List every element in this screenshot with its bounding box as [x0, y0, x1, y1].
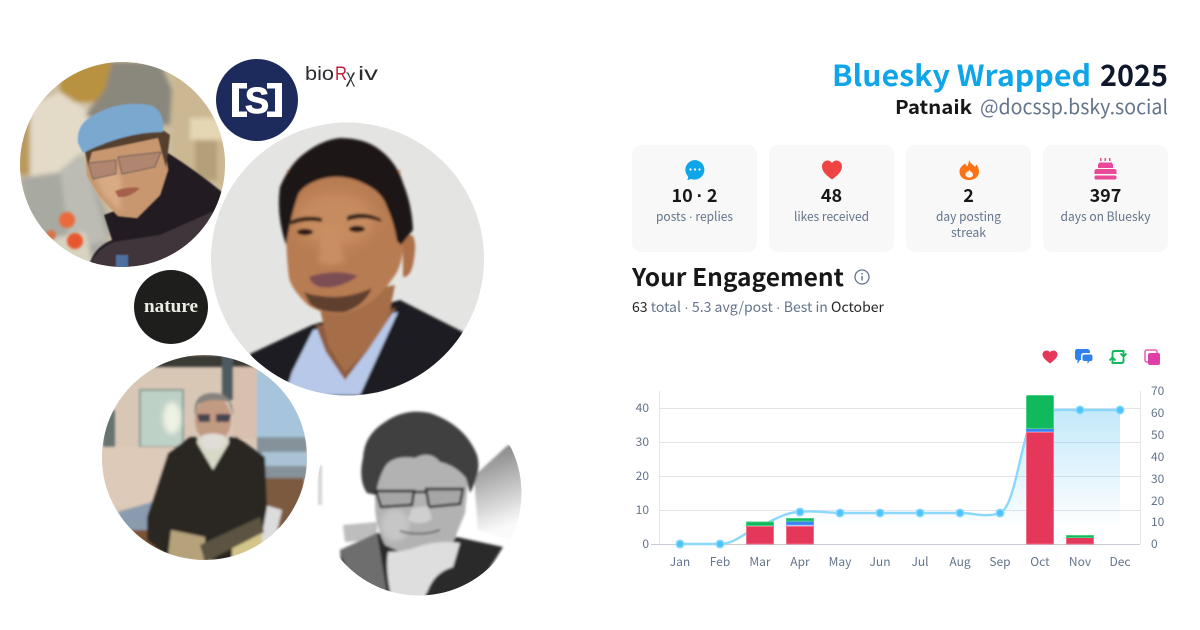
user name and handle	[895, 91, 1168, 120]
stat card: likes received: likes received	[794, 206, 869, 225]
stat card: likes received: 48	[821, 182, 842, 208]
avatar: man in dark blazer	[211, 122, 484, 400]
logo: bioRxiv: χ	[345, 63, 356, 87]
left axis labels: 0	[642, 535, 649, 552]
heading: Your Engagement: Your Engagement	[631, 258, 844, 293]
month labels: Dec	[1109, 553, 1131, 570]
month labels: Aug	[949, 553, 971, 570]
left axis labels: 40	[636, 399, 649, 416]
cumulative points	[676, 406, 1124, 548]
stat card: day posting streak: day posting	[936, 206, 1001, 225]
stat card: likes received	[769, 145, 894, 252]
icon: cake	[1094, 158, 1116, 180]
icon: info	[855, 270, 869, 284]
stat card: day posting streak	[906, 145, 1031, 252]
stat card: day posting streak: streak	[951, 222, 986, 241]
left axis labels: 10	[636, 501, 649, 518]
icon: reposts	[1110, 351, 1126, 363]
logo: bioRxiv: R	[335, 64, 347, 85]
logo: nature: nature	[144, 296, 198, 317]
bar: April	[786, 518, 814, 544]
right axis labels: 10	[1151, 513, 1165, 530]
engagement summary: 63 total · 5.3 avg/post · Best in October	[632, 297, 885, 317]
bar: October	[1026, 396, 1054, 544]
avatar: man in blue cap	[18, 60, 228, 270]
stat card: posts and replies	[632, 145, 757, 252]
stat card: posts and replies: posts · replies	[656, 206, 733, 225]
logo: nature	[134, 270, 208, 344]
icon: speech bubble	[685, 160, 704, 180]
right axis labels: 50	[1151, 426, 1165, 443]
month labels: Jan	[670, 553, 690, 570]
left axis labels	[636, 399, 649, 552]
stat card: days on Bluesky	[1043, 145, 1168, 252]
stat card: days on Bluesky: days on Bluesky	[1060, 206, 1151, 225]
month labels	[670, 553, 1131, 570]
month labels: Oct	[1030, 553, 1050, 570]
stat card: day posting streak: 2	[963, 182, 974, 208]
month labels: Mar	[749, 553, 771, 570]
chart legend	[1042, 349, 1160, 365]
user name and handle: @docssp.bsky.social	[980, 91, 1168, 120]
month labels: Sep	[989, 553, 1011, 570]
cumulative area	[680, 410, 1120, 544]
logo: bioRxiv: bio	[305, 64, 334, 85]
icon: replies	[1075, 349, 1092, 364]
left axis labels: 30	[636, 433, 649, 450]
cumulative line	[680, 410, 1120, 544]
stat card: days on Bluesky: 397	[1090, 182, 1121, 208]
right axis labels: 70	[1151, 382, 1165, 399]
icon: quotes	[1145, 350, 1160, 365]
icon: flame	[960, 160, 979, 180]
icon: like	[1042, 350, 1058, 364]
logo: SSRN	[216, 59, 298, 141]
chart: monthly engagement	[636, 382, 1165, 570]
left axis labels: 20	[636, 467, 649, 484]
month labels: Jun	[869, 553, 891, 570]
user name and handle: Patnaik	[895, 93, 973, 120]
right axis labels: 20	[1151, 492, 1165, 509]
grid lines	[660, 391, 1140, 544]
month labels: Feb	[710, 553, 730, 570]
month labels: Jul	[911, 553, 929, 570]
title: Bluesky Wrapped	[832, 53, 1091, 95]
stat card: posts and replies: 10 · 2	[671, 182, 718, 208]
bar: March	[746, 522, 774, 544]
month labels: Apr	[790, 553, 810, 570]
month labels: Nov	[1069, 553, 1092, 570]
logo: bioRxiv	[305, 63, 379, 87]
right axis labels: 30	[1151, 470, 1165, 487]
avatar: man in dark sweater on sofa	[102, 355, 307, 565]
logo: bioRxiv: iv	[358, 64, 379, 85]
right axis labels: 60	[1151, 404, 1165, 421]
title: 2025	[1100, 53, 1168, 95]
avatar: black and white portrait	[317, 410, 522, 596]
bar: November	[1066, 536, 1094, 544]
right axis labels: 0	[1151, 535, 1158, 552]
icon: heart	[822, 160, 842, 180]
right axis labels	[1151, 382, 1165, 552]
right axis labels: 40	[1151, 448, 1165, 465]
logo: SSRN: S	[245, 80, 269, 121]
month labels: May	[829, 553, 852, 570]
